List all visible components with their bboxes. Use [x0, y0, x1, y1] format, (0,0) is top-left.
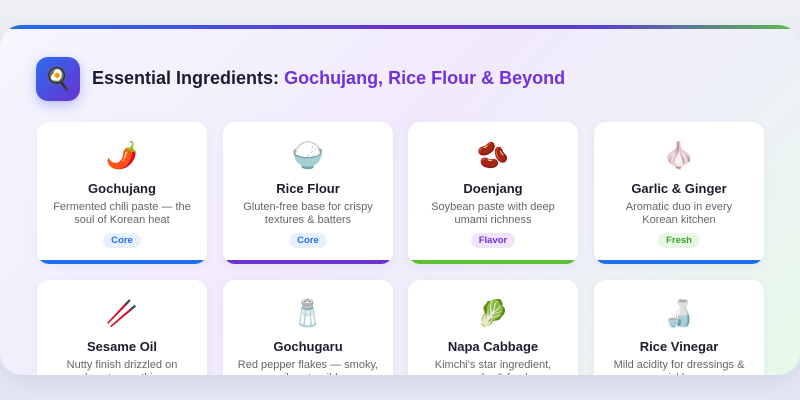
card: Doenjang: Flavor [479, 235, 507, 246]
card: Gochujang: Core [111, 235, 133, 246]
card: Sesame Oil: Sesame Oil [87, 339, 157, 354]
card: Rice Vinegar: Rice Vinegar [640, 339, 718, 354]
title: Essential Ingredients: Gochujang, Rice Flour & Beyond [92, 68, 565, 88]
card: Garlic & Ginger: Aromatic duo in every Korean kitchen [626, 201, 732, 226]
card: Rice Flour: 🍚 [292, 140, 324, 170]
card: Rice Vinegar [594, 280, 764, 375]
card: Sesame Oil [37, 280, 207, 375]
card: Napa Cabbage: 🥬 [477, 298, 509, 328]
card: Doenjang: Soybean paste with deep umami richness [431, 201, 555, 226]
card: Gochujang: Fermented chili paste — the soul of Korean heat [53, 201, 191, 226]
card: Garlic & Ginger: Garlic & Ginger [631, 181, 727, 196]
card: Gochujang: Gochujang [88, 181, 156, 196]
card: Gochugaru: Gochugaru [273, 339, 343, 354]
card: Doenjang: Doenjang [463, 181, 523, 196]
card: Gochugaru: 🧂 [292, 298, 324, 328]
card: Rice Flour [223, 122, 393, 264]
card: Napa Cabbage: Napa Cabbage [448, 339, 538, 354]
card: Garlic & Ginger: Fresh [666, 235, 692, 246]
card: Rice Vinegar: 🍶 [663, 298, 695, 328]
card: Rice Flour: Rice Flour [276, 181, 340, 196]
card: Doenjang: 🫘 [477, 140, 509, 170]
card: Napa Cabbage [408, 280, 578, 375]
card: Gochugaru [223, 280, 393, 375]
card: Garlic & Ginger [594, 122, 764, 264]
card: Rice Flour: Gluten-free base for crispy textures & batters [243, 201, 373, 226]
card: Rice Flour: Core [297, 235, 319, 246]
icon: frying pan: 🍳 [44, 66, 72, 91]
card: Sesame Oil: 🥢 [106, 298, 138, 328]
icon: frying pan [36, 57, 80, 101]
card: Gochujang: 🌶️ [106, 140, 138, 170]
card: Gochujang [37, 122, 207, 264]
card: Doenjang [408, 122, 578, 264]
card: Garlic & Ginger: 🧄 [663, 140, 695, 170]
